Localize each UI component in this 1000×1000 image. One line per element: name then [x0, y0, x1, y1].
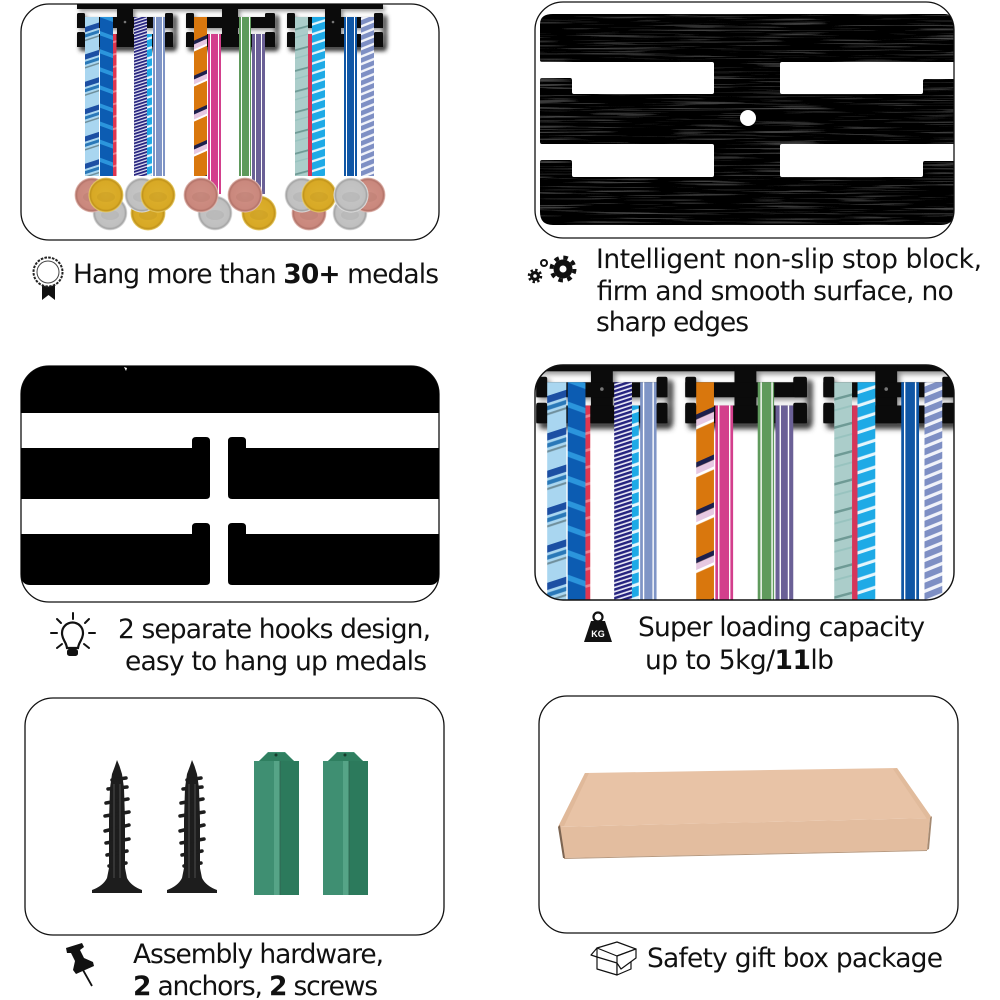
icon: medal rosette [34, 258, 62, 300]
panel: two separate hooks design [20, 366, 440, 602]
caption: intelligent non-slip stop block [596, 244, 982, 338]
icon: kg weight: KG [591, 629, 605, 639]
panel: gift box [539, 696, 958, 933]
caption: two separate hooks: 2 separate hooks design, [118, 614, 431, 645]
caption: hang more than 30+ medals: Hang more than 30+ medals [73, 259, 439, 290]
icon: light bulb [51, 613, 95, 655]
caption: two separate hooks: easy to hang up medals [125, 646, 427, 677]
rack and ribbons enlarged [536, 366, 954, 600]
screws [92, 760, 217, 893]
kraft box [558, 768, 932, 859]
panel: medal hanger with medals [21, 4, 439, 240]
icon: kg weight [584, 612, 612, 642]
rack and ribbons [77, 4, 387, 194]
panel: ribbons close-up [535, 364, 960, 624]
medals [74, 178, 386, 230]
icon: open box [591, 942, 636, 975]
caption: intelligent non-slip stop block: Intelligent non-slip stop block, [596, 244, 982, 275]
caption: super loading capacity: Super loading capacity [638, 612, 925, 643]
icon: push pin [66, 943, 94, 986]
caption: safety gift box package: Safety gift box package [647, 943, 943, 974]
black bars and hooks [20, 366, 440, 585]
caption: two separate hooks [118, 614, 431, 677]
caption: super loading capacity: up to 5kg/11lb [645, 645, 834, 676]
caption: super loading capacity [638, 612, 925, 676]
icon: gears [529, 258, 574, 282]
caption: intelligent non-slip stop block: firm and smooth surface, no [597, 276, 954, 307]
anchors [254, 752, 368, 895]
caption: assembly hardware [133, 939, 384, 1000]
panel: assembly hardware [25, 698, 444, 935]
panel: non-slip stop block close-up [535, 2, 954, 238]
caption: assembly hardware: Assembly hardware, [133, 939, 384, 970]
caption: intelligent non-slip stop block: sharp edges [596, 307, 749, 338]
black plate with slots [540, 14, 954, 225]
